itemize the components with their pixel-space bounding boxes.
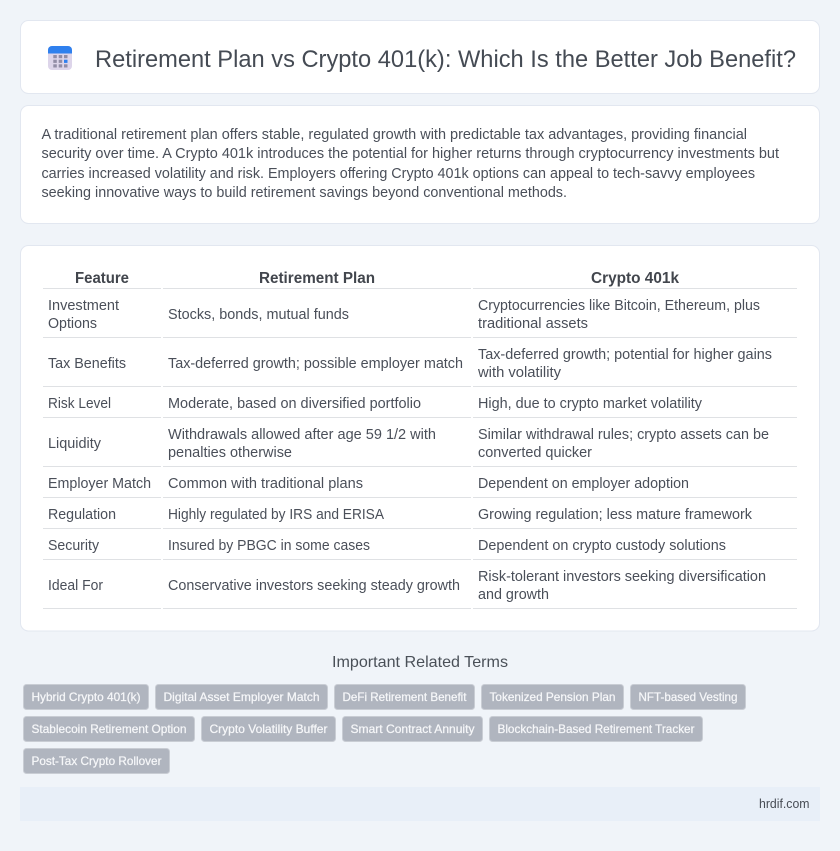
- tag: [202, 716, 336, 742]
- table header row: Retirement Plan: [259, 270, 375, 287]
- row: investment options: Options: [48, 316, 97, 332]
- icon: calendar: [48, 46, 72, 70]
- row: liquidity: Liquidity: [48, 436, 102, 452]
- row: investment options: traditional assets: [478, 316, 588, 332]
- row: ideal for: Conservative investors seeking steady growth: [168, 578, 460, 594]
- row: regulation: Highly regulated by IRS and ERISA: [168, 507, 384, 523]
- row: risk level: Risk Level: [48, 396, 111, 412]
- intro text: [42, 127, 779, 201]
- row: risk level: Moderate, based on diversified portfolio: [168, 396, 421, 412]
- tag: [482, 684, 624, 710]
- tag: Stablecoin Retirement Option: [32, 722, 186, 736]
- row: security: Dependent on crypto custody solutions: [478, 538, 726, 554]
- tag: Digital Asset Employer Match: [164, 690, 320, 704]
- row: investment options: [48, 298, 760, 332]
- row: tax benefits: Tax Benefits: [48, 356, 126, 372]
- row: tax benefits: Tax-deferred growth; potential for higher gains: [478, 347, 772, 363]
- row: liquidity: Withdrawals allowed after age 59 1/2 with: [168, 427, 436, 443]
- row: liquidity: [48, 427, 769, 461]
- row: ideal for: [48, 569, 766, 603]
- intro text: seeking innovative ways to build retirement savings beyond conventional methods.: [42, 185, 567, 201]
- row: employer match: Common with traditional plans: [168, 476, 363, 492]
- tag: NFT-based Vesting: [638, 690, 738, 704]
- tag: Smart Contract Annuity: [350, 722, 474, 736]
- title: Retirement Plan vs Crypto 401(k): Which Is the Better Job Benefit?: [95, 46, 796, 73]
- row: tax benefits: Tax-deferred growth; possible employer match: [168, 356, 463, 372]
- tag: [24, 748, 170, 774]
- tag: DeFi Retirement Benefit: [342, 690, 467, 704]
- tag: Hybrid Crypto 401(k): [32, 690, 141, 704]
- intro text: carries increased volatility and risk. Employers offering Crypto 401k options can appeal to tech-savvy employees: [42, 166, 755, 182]
- row: regulation: Regulation: [48, 507, 116, 523]
- row: employer match: Employer Match: [48, 476, 151, 492]
- row: ideal for: and growth: [478, 587, 549, 603]
- row: tax benefits: [48, 347, 772, 381]
- row: investment options: Stocks, bonds, mutual funds: [168, 307, 349, 323]
- row: employer match: Dependent on employer adoption: [478, 476, 689, 492]
- tag: Tokenized Pension Plan: [490, 690, 616, 704]
- tag: [630, 684, 746, 710]
- footer source: hrdif.com: [759, 796, 810, 811]
- tag: [490, 716, 702, 742]
- tag: Crypto Volatility Buffer: [210, 722, 328, 736]
- row: risk level: [48, 396, 703, 412]
- table header row: Feature: [75, 270, 129, 287]
- row: regulation: Growing regulation; less mature framework: [478, 507, 753, 523]
- row: liquidity: Similar withdrawal rules; crypto assets can be: [478, 427, 769, 443]
- tag: [156, 684, 328, 710]
- row: liquidity: converted quicker: [478, 445, 592, 461]
- intro text: A traditional retirement plan offers stable, regulated growth with predictable tax advantages, providing financial: [42, 127, 747, 143]
- row: liquidity: penalties otherwise: [168, 445, 292, 461]
- row: investment options: Cryptocurrencies like Bitcoin, Ethereum, plus: [478, 298, 760, 314]
- panel: introduction: [20, 106, 820, 224]
- footer bar: [20, 787, 820, 821]
- row: security: Security: [48, 538, 100, 554]
- row: risk level: High, due to crypto market volatility: [478, 396, 703, 412]
- row: ideal for: Ideal For: [48, 578, 103, 594]
- intro text: security over time. A Crypto 401k introduces the potential for higher returns through cryptocurrency investments but: [42, 146, 779, 162]
- heading: important related terms: Important Related Terms: [332, 654, 508, 671]
- table header row: Crypto 401k: [591, 270, 679, 287]
- row: security: [48, 538, 726, 554]
- row: employer match: [48, 476, 689, 492]
- tag: Post-Tax Crypto Rollover: [32, 754, 162, 768]
- row: ideal for: Risk-tolerant investors seeking diversification: [478, 569, 766, 585]
- table header row: [75, 270, 679, 287]
- panel: comparison table: [20, 246, 820, 631]
- tag: [342, 716, 482, 742]
- row: regulation: [48, 507, 753, 523]
- tag: [334, 684, 474, 710]
- panel: title header: [20, 20, 820, 94]
- tag: Blockchain-Based Retirement Tracker: [498, 722, 694, 736]
- tag: [24, 684, 148, 710]
- row: security: Insured by PBGC in some cases: [168, 538, 370, 554]
- related term tags: [24, 684, 746, 774]
- row: investment options: Investment: [48, 298, 119, 314]
- tag: [24, 716, 194, 742]
- row: tax benefits: with volatility: [477, 365, 562, 381]
